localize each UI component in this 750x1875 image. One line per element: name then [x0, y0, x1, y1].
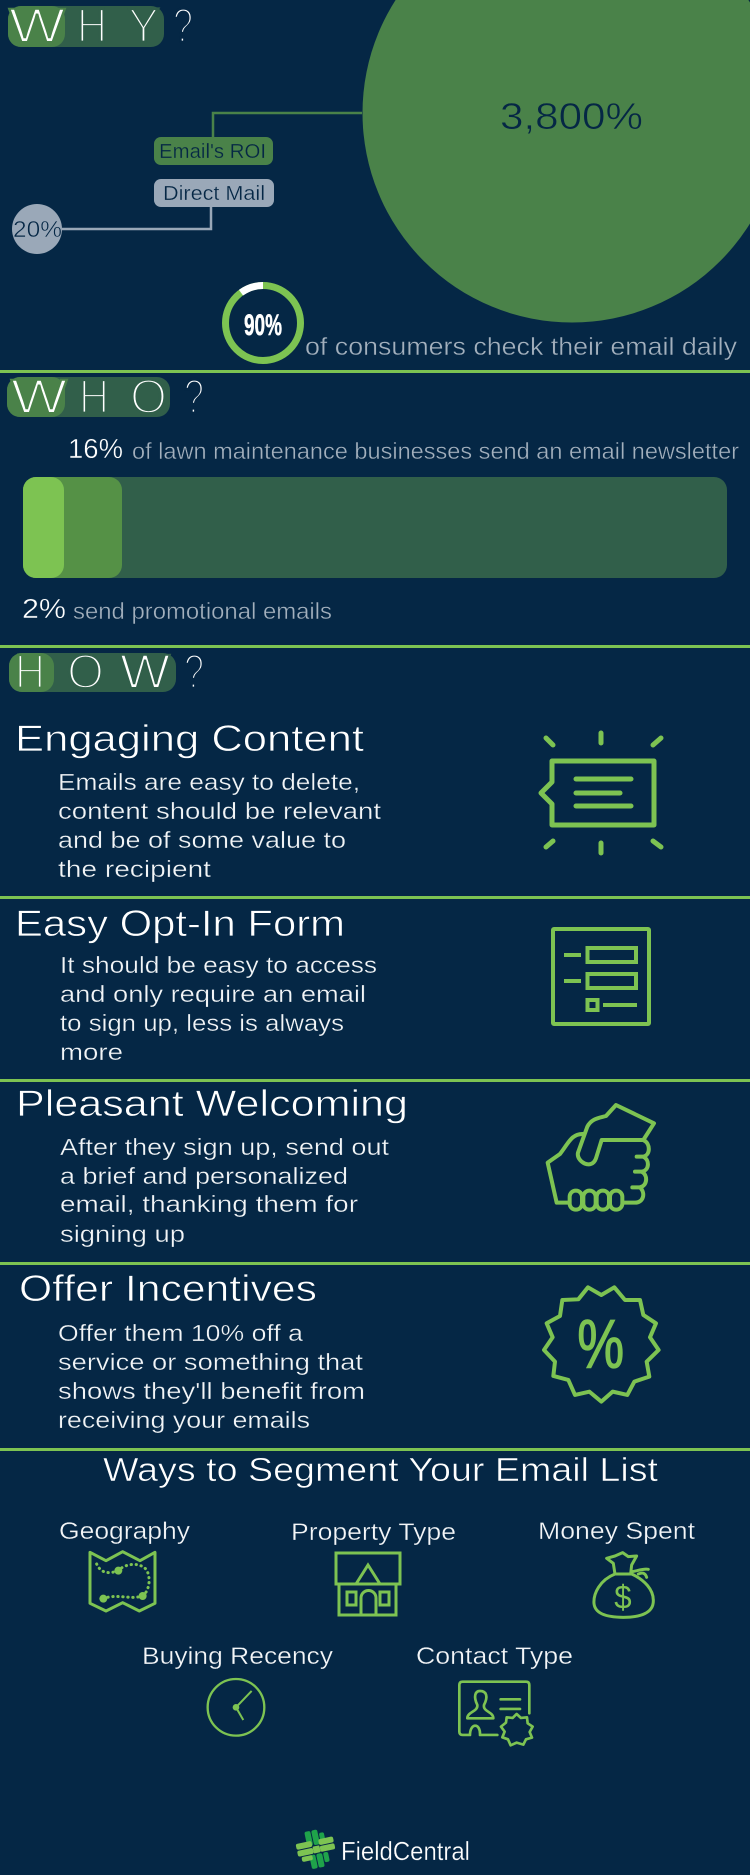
text: engaging content body: content should be relevant	[58, 798, 382, 824]
label: Direct Mail: Direct Mail	[163, 183, 265, 205]
stat: 2%	[22, 593, 332, 624]
donut chart: 90%	[226, 286, 300, 360]
small circle: direct mail 20%: 20%	[13, 216, 62, 242]
stat: 16%: 16%	[68, 433, 123, 464]
panel: engaging content	[15, 718, 661, 882]
text: welcoming body: a brief and personalized	[60, 1163, 348, 1189]
heading: how: W	[120, 646, 171, 699]
heading: why	[8, 0, 193, 53]
text: incentives body	[58, 1320, 365, 1433]
title: pleasant welcoming: Pleasant Welcoming	[16, 1083, 408, 1124]
heading: why: ?	[173, 0, 193, 53]
heading: how: ?	[184, 646, 204, 699]
panel: offer incentives	[19, 1268, 659, 1433]
panel: who	[7, 371, 739, 624]
heading: how: H	[15, 646, 45, 699]
heading: who: ?	[184, 371, 204, 424]
label: contact type: Contact Type	[416, 1643, 573, 1670]
icon: contact card	[459, 1682, 533, 1745]
connector: email ROI	[213, 113, 362, 137]
logo: FieldCentral	[293, 1826, 470, 1872]
heading: how	[9, 646, 204, 699]
icon: money bag: $	[614, 1579, 632, 1616]
text: engaging content body	[58, 769, 382, 882]
text: welcoming body: signing up	[60, 1221, 185, 1247]
heading: who: W	[11, 371, 68, 424]
big circle: email ROI 3,800%	[362, 0, 750, 322]
label: Direct Mail	[154, 179, 274, 207]
text: incentives body: shows they'll benefit from	[58, 1378, 365, 1404]
text: opt-in body: more	[60, 1039, 123, 1065]
connector: direct mail	[62, 207, 211, 229]
heading: who: H	[79, 371, 109, 424]
text: opt-in body: to sign up, less is always	[60, 1010, 344, 1036]
label: Email's ROI: Email's ROI	[159, 141, 266, 163]
bar chart: 16% and 2%	[23, 477, 727, 578]
stat: 2%: 2%	[22, 593, 66, 624]
heading: who: O	[130, 371, 167, 424]
heading: how: O	[67, 646, 104, 699]
heading: who	[7, 371, 204, 424]
icon: map	[90, 1552, 155, 1611]
heading: why: W	[9, 0, 66, 53]
title: easy opt-in form: Easy Opt-In Form	[15, 903, 345, 944]
big circle: email ROI 3,800%: 3,800%	[500, 96, 643, 137]
heading: why: Y	[128, 0, 159, 53]
icon: clock	[208, 1679, 264, 1736]
title: engaging content: Engaging Content	[15, 718, 365, 759]
text: engaging content body: Emails are easy to delete,	[58, 769, 360, 795]
small circle: direct mail 20%	[12, 204, 62, 254]
donut chart: 90%: 90%	[244, 309, 282, 342]
icon: house	[336, 1553, 400, 1615]
icon: handshake fist	[548, 1105, 654, 1210]
icon: speech bubble with rays	[541, 733, 661, 853]
text: consumers check email daily: of consumers check their email daily	[305, 333, 738, 361]
icon: money bag	[594, 1553, 653, 1617]
icon: logo weave	[293, 1826, 339, 1872]
label: buying recency: Buying Recency	[142, 1643, 333, 1670]
label: property type: Property Type	[291, 1519, 456, 1546]
text: incentives body: Offer them 10% off a	[58, 1320, 304, 1346]
label: geography: Geography	[59, 1518, 190, 1545]
text: welcoming body: email, thanking them for	[60, 1191, 358, 1217]
title: ways to segment: Ways to Segment Your Email List	[103, 1451, 658, 1488]
label: money spent: Money Spent	[538, 1518, 695, 1545]
text: engaging content body: the recipient	[58, 856, 212, 882]
text: FieldCentral: FieldCentral	[341, 1836, 470, 1866]
icon: form	[553, 929, 649, 1024]
panel: why	[8, 0, 750, 361]
stat: 2%: send promotional emails	[73, 598, 332, 624]
text: opt-in body	[60, 952, 377, 1065]
text: engaging content body: and be of some value to	[58, 827, 346, 853]
text: welcoming body: After they sign up, send out	[60, 1134, 390, 1160]
text: welcoming body	[60, 1134, 390, 1247]
text: opt-in body: and only require an email	[60, 981, 366, 1007]
panel: easy opt-in form	[15, 903, 649, 1065]
text: incentives body: receiving your emails	[58, 1407, 310, 1433]
text: opt-in body: It should be easy to access	[60, 952, 377, 978]
text: incentives body: service or something that	[58, 1349, 364, 1375]
panel: pleasant welcoming	[16, 1083, 654, 1247]
icon: percent badge	[544, 1287, 659, 1402]
stat: 16%: of lawn maintenance businesses send an email newsletter	[132, 438, 739, 464]
heading: why: H	[77, 0, 107, 53]
icon: percent badge: %	[577, 1307, 624, 1383]
label: Email's ROI	[154, 137, 273, 165]
panel: ways to segment	[59, 1451, 695, 1745]
title: offer incentives: Offer Incentives	[19, 1268, 317, 1309]
